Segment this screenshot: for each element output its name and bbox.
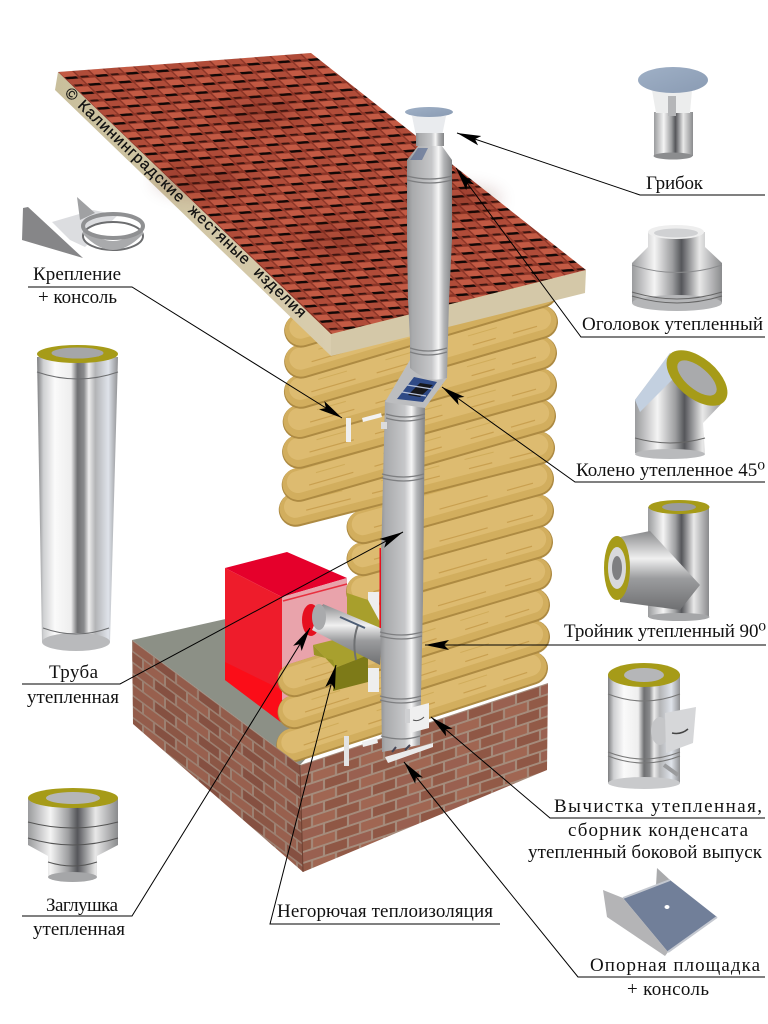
product: support platform: [603, 868, 717, 956]
upper pipe: [407, 160, 452, 380]
product: insulated plug: [28, 788, 118, 882]
product: wall bracket: [22, 197, 143, 258]
callout: Грибок: Грибок: [646, 173, 704, 194]
stove: red box: [225, 552, 347, 723]
product: 45 degree elbow: [635, 340, 737, 459]
callout: Оголовок утепленный: Оголовок утепленный: [582, 314, 763, 335]
product: cap: [638, 67, 708, 160]
pipe joints: [380, 176, 452, 739]
callout: Негорючая теплоизоляция: [270, 665, 500, 924]
callout: Заглушка утепленная: Заглушка: [46, 895, 119, 916]
lower pipe: [380, 400, 425, 752]
insulation through wall: [313, 593, 380, 691]
roof tile shading: [155, 96, 500, 256]
product: 90 degree tee: [604, 500, 710, 621]
support platform: [385, 743, 433, 763]
callout: Труба утепленная: [22, 532, 403, 708]
product: insulated head: [632, 225, 722, 311]
callout: Вычистка утепленная: утепленный боковой выпуск: [528, 842, 763, 863]
callout: Заглушка утепленная: [22, 628, 310, 940]
clean-out door: [405, 703, 429, 733]
stove connector pipe: [302, 604, 383, 665]
callout: Оголовок утепленный: [456, 168, 765, 337]
wall bracket on chimney: [346, 413, 387, 442]
callout: Крепление + консоль: + консоль: [38, 287, 117, 308]
log wall: [291, 253, 542, 748]
concrete floor: [132, 618, 360, 765]
callout: Опорная площадка: [404, 762, 765, 1000]
roof: [55, 53, 586, 356]
fungus cap: [405, 107, 453, 160]
callout: Вычистка утепленная: [431, 717, 765, 863]
callout: Заглушка утепленная: утепленная: [33, 919, 125, 940]
callout: Вычистка утепленная: сборник конденсата: [568, 820, 749, 841]
callout: Труба утепленная: Труба: [49, 662, 99, 683]
callout: Труба утепленная: утепленная: [27, 687, 119, 708]
product: insulated pipe: [37, 345, 118, 651]
callout: Колено утепленное 45: [442, 387, 765, 482]
callout: Опорная площадка: Опорная площадка: [590, 955, 761, 976]
elbow window: [397, 377, 437, 402]
callout: Колено утепленное 45: Колено утепленное 45⁰: [576, 460, 765, 481]
brick foundation: [132, 640, 548, 872]
callout: Грибок: [457, 133, 765, 195]
mounting plates: [344, 592, 379, 766]
callout: Крепление + консоль: Крепление: [33, 264, 121, 285]
callout: Вычистка утепленная: Вычистка утепленная,: [554, 796, 762, 817]
callout: Негорючая теплоизоляция: Негорючая теплоизоляция: [277, 901, 493, 922]
callout: Тройник утепленный 90: Тройник утепленный 90⁰: [564, 621, 766, 642]
elbow: [385, 360, 447, 408]
callout: Опорная площадка: + консоль: [627, 979, 709, 1000]
callout: Крепление + консоль: [28, 264, 342, 418]
main chimney pipe: [380, 107, 453, 763]
roof edge copyright: © Калининградские жестяные изделия: [61, 85, 309, 321]
product: clean-out: [608, 663, 696, 789]
red stripe: [380, 548, 381, 628]
